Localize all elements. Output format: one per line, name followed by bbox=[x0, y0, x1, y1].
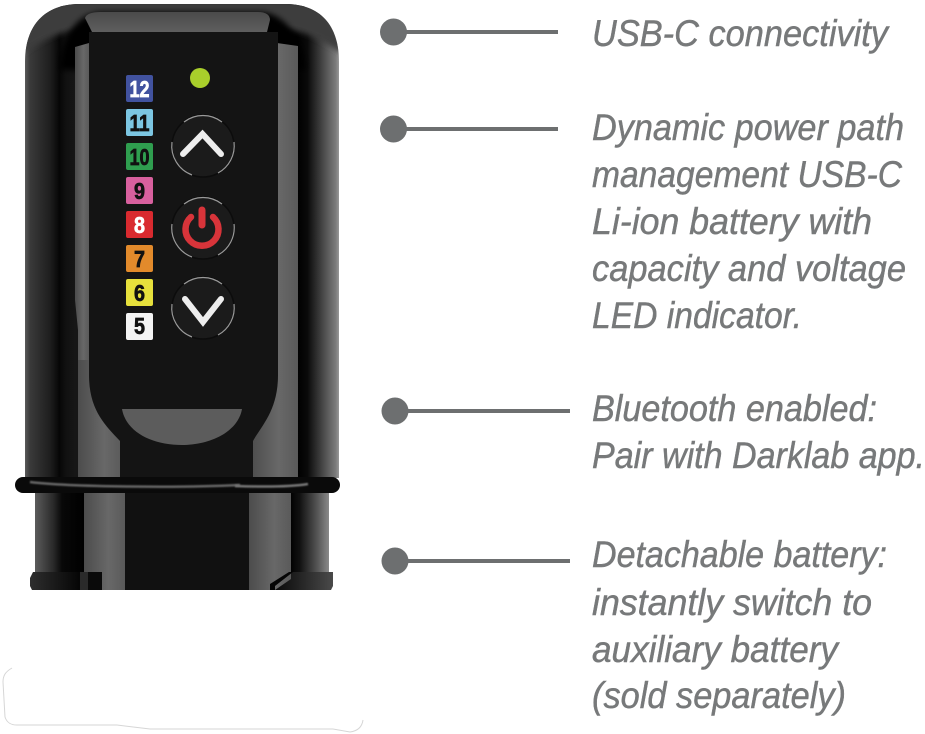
callout text: detachable battery: instantly switch to bbox=[592, 582, 872, 623]
level 5: 5 bbox=[134, 313, 145, 339]
down button bbox=[172, 277, 234, 339]
foot left bbox=[30, 572, 80, 590]
callout text: detachable battery bbox=[592, 534, 887, 716]
callout marker: detachable battery bbox=[382, 548, 570, 574]
callout text: Bluetooth bbox=[592, 388, 925, 476]
foot right notch bbox=[270, 572, 293, 590]
level 5 bbox=[126, 313, 153, 340]
callout text: detachable battery: (sold separately) bbox=[592, 675, 846, 716]
lower left highlight band bbox=[84, 492, 125, 590]
device upper body bbox=[25, 4, 339, 478]
retaining ring bbox=[15, 477, 340, 493]
lower right section bbox=[290, 492, 329, 573]
battery device bbox=[15, 0, 344, 590]
foot right bbox=[275, 572, 333, 590]
callout text: power path: Dynamic power path bbox=[592, 107, 904, 148]
left side highlight strip bbox=[75, 43, 89, 478]
level 6 bbox=[126, 279, 153, 306]
control panel bbox=[89, 32, 278, 478]
callout text: detachable battery: auxiliary battery bbox=[592, 629, 840, 670]
callout marker: Bluetooth bbox=[382, 398, 570, 424]
callout text: power path bbox=[592, 107, 906, 336]
status LED bbox=[190, 68, 210, 88]
top highlight bbox=[85, 12, 270, 32]
callout text: Bluetooth: Bluetooth enabled: bbox=[592, 388, 877, 429]
callout text: power path: capacity and voltage bbox=[592, 248, 906, 289]
lower left highlight bbox=[78, 360, 122, 478]
callout text: USB-C: USB-C connectivity bbox=[592, 13, 890, 54]
right side highlight strip bbox=[250, 43, 298, 478]
power button bbox=[172, 197, 234, 259]
level 9 bbox=[126, 177, 153, 204]
callout text: power path: management USB-C bbox=[592, 154, 902, 195]
up button bbox=[172, 115, 234, 177]
top cap shading bbox=[20, 0, 344, 70]
lower centre panel bbox=[125, 492, 249, 590]
level 8 bbox=[126, 211, 153, 238]
level 7: 7 bbox=[134, 246, 145, 272]
level 8: 8 bbox=[134, 212, 145, 238]
level 11: 11 bbox=[130, 110, 150, 136]
callout text: power path: Li-ion battery with bbox=[592, 201, 872, 242]
callout text: power path: LED indicator. bbox=[592, 295, 802, 336]
callout text: detachable battery: Detachable battery: bbox=[592, 534, 887, 575]
lower left section bbox=[35, 492, 84, 573]
callout marker: USB-C bbox=[380, 18, 558, 46]
level 6: 6 bbox=[134, 280, 145, 306]
level 7 bbox=[126, 245, 153, 272]
panel thumb recess bbox=[122, 409, 242, 445]
level 12: 12 bbox=[130, 76, 150, 102]
lower right highlight band bbox=[249, 492, 291, 590]
level 10: 10 bbox=[130, 144, 150, 170]
level 9: 9 bbox=[134, 178, 145, 204]
callout marker: power path bbox=[380, 116, 558, 142]
foot left notch bbox=[80, 572, 102, 590]
faint outline below device bbox=[3, 668, 363, 732]
